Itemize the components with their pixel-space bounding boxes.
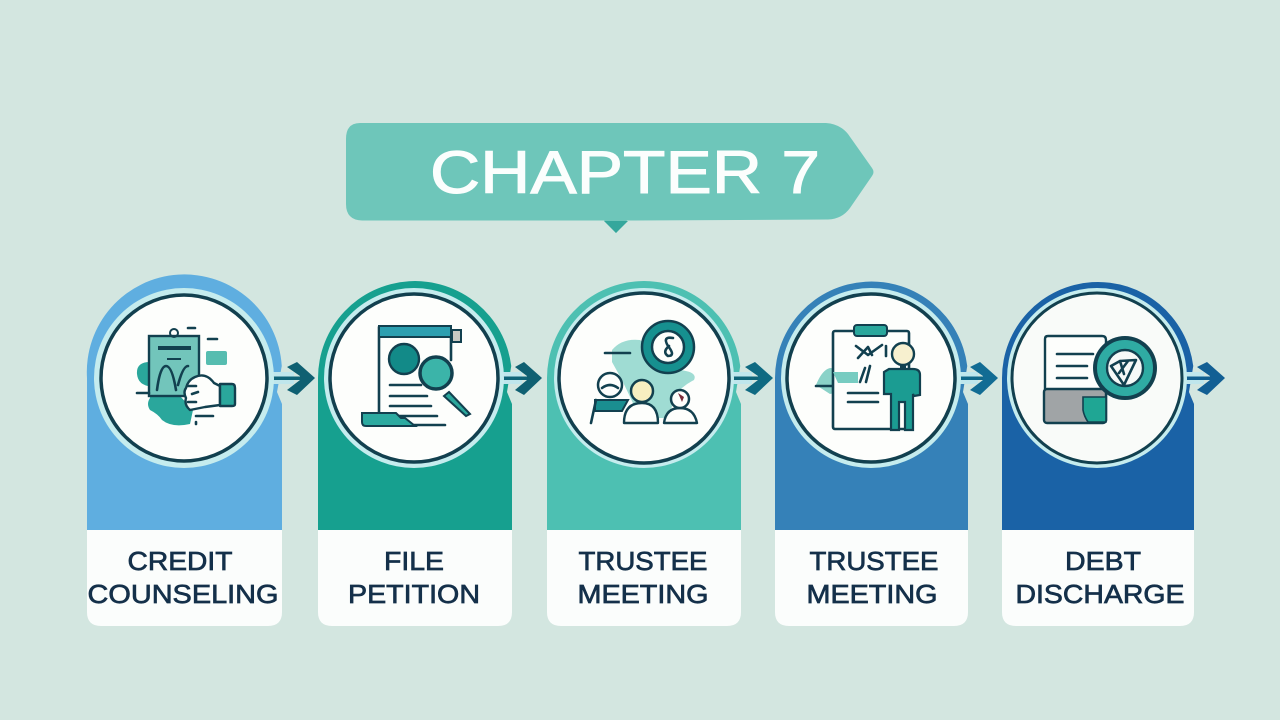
step 3 label card: TRUSTEE [578,546,708,576]
step 5 label card: DEBT [1065,546,1141,576]
icon: clipboard and hand [137,328,235,425]
step 2 label card: FILE [384,546,444,576]
step 4 coloured panel [775,282,968,530]
step 3 label card: MEETING [578,579,708,609]
step 3 label card [547,530,741,626]
title banner [346,123,874,233]
step 5 coloured panel [1002,282,1194,530]
step 4 label card [775,530,968,626]
step 3 coloured panel [547,281,741,530]
step 2 label card [318,530,512,626]
step 1: credit counseling [87,274,315,626]
step 1 label card: COUNSELING [88,579,278,609]
icon: document and seal [1044,336,1157,423]
icon: three people and coin [591,321,697,423]
step 2 arrow [502,362,542,395]
step 3 arrow [732,362,773,395]
icon: clipboard and person [816,325,920,430]
step 2: file petition [318,281,542,626]
step 3: trustee meeting [547,281,773,626]
step 3 medallion [554,288,734,468]
title text: CHAPTER 7 [430,139,820,206]
step 1 coloured panel [87,274,282,530]
step 2 label card: PETITION [348,579,480,609]
step 4 medallion [781,288,961,468]
step 1 label card: CREDIT [128,546,233,576]
step 5: debt discharge [1002,282,1225,626]
step 1 medallion [94,288,274,468]
step 5 medallion [1007,288,1187,468]
icon: document and magnifier [362,326,470,426]
step 5 label card [1002,530,1194,626]
step 4 label card: MEETING [806,579,938,609]
step 1 arrow [272,362,315,395]
step 2 coloured panel [318,281,512,530]
step 2 medallion [324,288,504,468]
step 4 label card: TRUSTEE [810,546,938,576]
step 4 arrow [958,362,998,395]
step 4: trustee meeting [775,282,998,626]
step 1 label card [87,530,282,626]
step 5 arrow [1184,362,1225,395]
step 5 label card: DISCHARGE [1016,579,1184,609]
